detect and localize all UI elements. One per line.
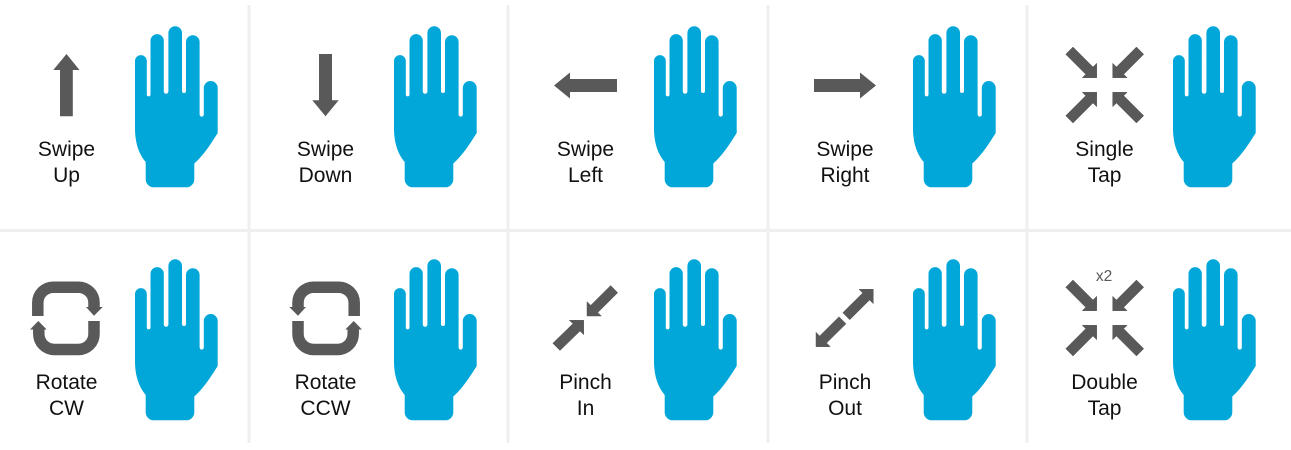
panel: pinch out bbox=[816, 259, 996, 420]
label: single tap: Tap bbox=[1088, 164, 1121, 187]
icon: hand bbox=[654, 259, 737, 420]
icon: hand bbox=[913, 26, 996, 187]
icon: hand bbox=[1173, 259, 1256, 420]
icon: hand bbox=[913, 259, 996, 420]
label: swipe left: Left bbox=[568, 164, 603, 187]
label: rotate ccw: Rotate bbox=[295, 371, 356, 394]
label: pinch in: Pinch bbox=[559, 371, 612, 394]
icon: right arrow bbox=[814, 72, 876, 98]
label: double tap: Double bbox=[1071, 371, 1138, 394]
icon: hand bbox=[394, 26, 477, 187]
label: swipe down: Down bbox=[299, 164, 352, 187]
panel: swipe up bbox=[38, 26, 218, 187]
icon: hand bbox=[135, 259, 218, 420]
label: rotate ccw: CCW bbox=[300, 397, 351, 420]
label: swipe right: Swipe bbox=[816, 138, 874, 161]
label: pinch out: Pinch bbox=[819, 371, 871, 394]
icon: four inward arrows bbox=[1066, 47, 1144, 123]
icon: hand bbox=[135, 26, 218, 187]
icon: down arrow bbox=[312, 54, 339, 116]
label: pinch out: Out bbox=[828, 397, 862, 420]
panel: swipe right bbox=[814, 26, 996, 187]
icon: left arrow bbox=[554, 72, 617, 98]
icon: hand bbox=[394, 259, 477, 420]
icon: hand bbox=[1173, 26, 1256, 187]
panel: pinch in bbox=[553, 259, 737, 420]
panel: swipe left bbox=[554, 26, 737, 187]
label: double tap: Tap bbox=[1088, 397, 1121, 420]
icon: four inward arrows bbox=[1066, 280, 1144, 356]
label: swipe down: Swipe bbox=[297, 138, 354, 161]
label: pinch in: In bbox=[577, 397, 594, 420]
label: swipe up: Up bbox=[53, 164, 80, 187]
panel: double tap bbox=[1066, 259, 1256, 420]
icon: clockwise rotation arrows bbox=[30, 287, 103, 350]
label: swipe right: Right bbox=[820, 164, 870, 187]
label: rotate cw: CW bbox=[49, 397, 84, 420]
panel: single tap bbox=[1066, 26, 1256, 187]
label: x2: x2 bbox=[1096, 268, 1112, 285]
label: swipe up: Swipe bbox=[38, 138, 95, 161]
icon: pinch in arrows bbox=[553, 286, 618, 350]
icon: hand bbox=[654, 26, 737, 187]
icon: counter-clockwise rotation arrows bbox=[289, 287, 362, 350]
label: rotate cw: Rotate bbox=[36, 371, 97, 394]
panel: rotate ccw bbox=[289, 259, 477, 420]
label: swipe left: Swipe bbox=[557, 138, 614, 161]
panel: swipe down bbox=[297, 26, 477, 187]
icon: up arrow bbox=[53, 54, 80, 116]
label: single tap: Single bbox=[1075, 138, 1134, 161]
icon: pinch out arrows bbox=[816, 289, 873, 347]
panel: rotate cw bbox=[30, 259, 218, 420]
